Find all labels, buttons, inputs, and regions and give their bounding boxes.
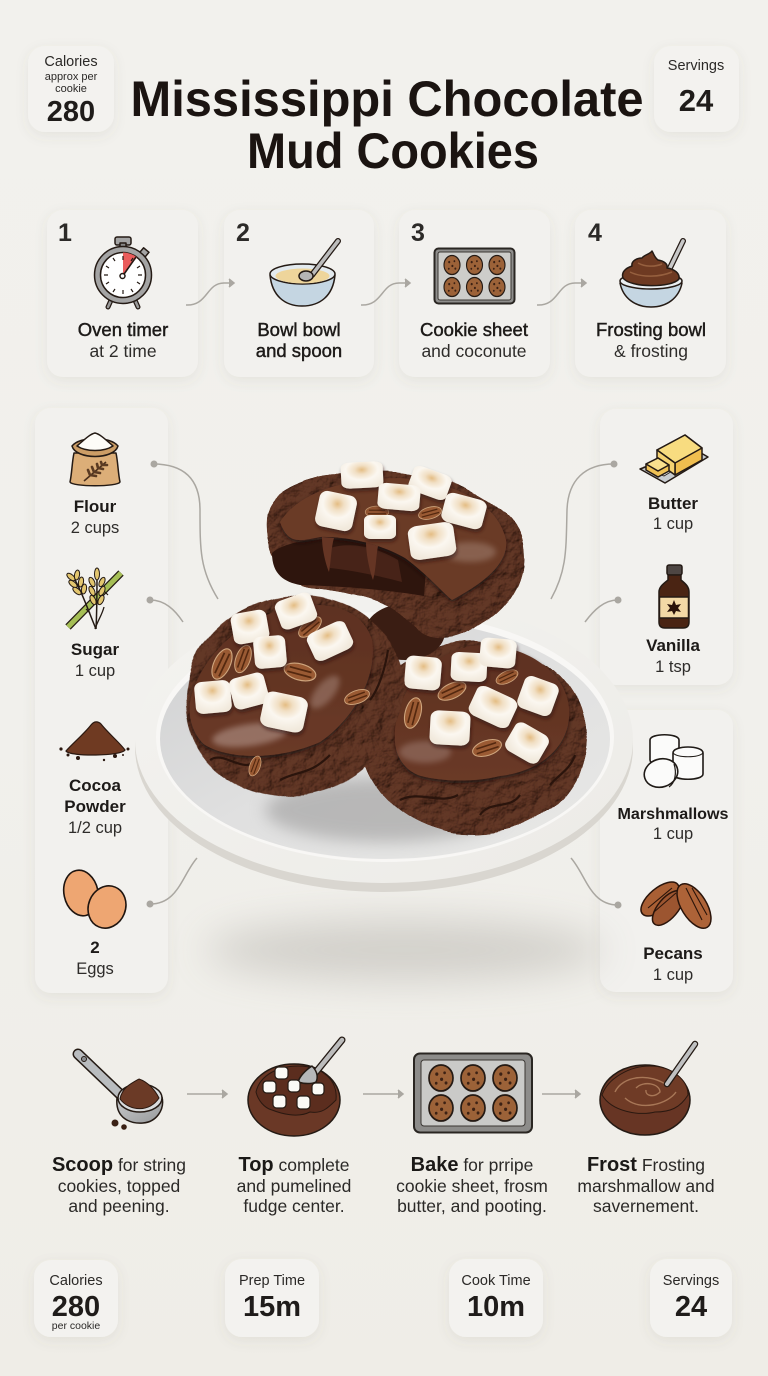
cookie: top with bite [266, 461, 524, 639]
process step: top: Top complete [238, 1154, 350, 1176]
panel: right ingredients bottom [600, 710, 733, 992]
arrow: step 1 to 2 [186, 279, 234, 305]
step card 4: frosting bowl [575, 210, 726, 377]
stat card: calories top: cookie [55, 83, 87, 95]
panel: right ingredients top [600, 409, 733, 685]
arrow: step 2 to 3 [361, 279, 410, 305]
stat card: calories top [28, 46, 114, 132]
stat card: calories top: Calories [44, 54, 98, 70]
process step: scoop: cookies, topped [58, 1176, 180, 1196]
panel: right ingredients bottom: Marshmallows [618, 806, 729, 823]
icon: frosting bowl [620, 241, 683, 307]
step card 1: oven timer: at 2 time [89, 341, 157, 361]
panel: left ingredients: 2 cups [71, 519, 119, 537]
panel: left ingredients: 1/2 cup [68, 819, 122, 837]
icon: baking tray [414, 1054, 532, 1132]
icon: cocoa powder pile [59, 722, 130, 761]
panel: left ingredients [35, 408, 168, 993]
stat card: servings: 24 [675, 1291, 707, 1323]
step card 2: bowl and spoon: 2 [236, 219, 250, 247]
panel: right ingredients bottom: 1 cup [653, 825, 693, 843]
step card 4: frosting bowl: Frosting bowl [596, 319, 706, 340]
stat card: cook time [449, 1259, 543, 1337]
icon: scoop [78, 1054, 163, 1130]
process step: frost: Frost Frosting [587, 1154, 705, 1176]
arrow: bake to frost [542, 1090, 580, 1098]
photo: plate of mud cookies [135, 461, 633, 892]
stat card: servings top: Servings [668, 58, 724, 74]
title: Mud Cookies [247, 123, 539, 179]
panel: left ingredients: Flour [74, 497, 117, 516]
stat card: calories [34, 1260, 118, 1337]
plate [135, 597, 633, 892]
stat card: servings top: 24 [679, 83, 714, 118]
cookie: front left [162, 571, 426, 821]
process step: scoop: and peening. [68, 1196, 170, 1216]
stat card: prep time [225, 1259, 319, 1337]
step card 1: oven timer [47, 210, 198, 377]
step card 2: bowl and spoon [224, 210, 374, 377]
step card 1: oven timer: Oven timer [78, 319, 168, 340]
process step: bake: cookie sheet, frosm [396, 1176, 548, 1196]
process step: frost: savernement. [593, 1196, 699, 1216]
stat card: prep time: Prep Time [239, 1273, 305, 1289]
stat card: servings [650, 1259, 732, 1337]
panel: right ingredients top: 1 tsp [655, 658, 691, 676]
panel: left ingredients: 1 cup [75, 662, 115, 680]
panel: left ingredients: Cocoa [69, 776, 122, 795]
panel: right ingredients bottom: 1 cup [653, 966, 693, 984]
ground shadow [205, 920, 605, 980]
icon: cookie with marshmallows [248, 1040, 342, 1136]
stat card: calories top: 280 [47, 96, 95, 128]
icon: sugar cane and wheat [66, 568, 121, 629]
step card 2: bowl and spoon: Bowl bowl [257, 319, 341, 340]
process step: bake [396, 1054, 548, 1216]
step card 2: bowl and spoon: and spoon [256, 340, 342, 361]
stat card: calories: per cookie [52, 1320, 100, 1332]
panel: right ingredients top: Vanilla [646, 636, 700, 655]
stat card: calories top: approx per [45, 71, 98, 83]
icon: pecans [635, 876, 718, 934]
step card 3: cookie sheet: and coconute [421, 341, 527, 361]
title: Mississippi Chocolate [130, 71, 644, 127]
stat card: prep time: 15m [243, 1291, 301, 1323]
icon: baking tray [434, 248, 514, 304]
step card 3: cookie sheet: 3 [411, 219, 425, 247]
cookie: bottom right [362, 604, 586, 834]
process step: bake: butter, and pooting. [397, 1196, 547, 1216]
icon: flour sack [70, 433, 120, 486]
stat card: calories: 280 [52, 1291, 100, 1323]
title [130, 71, 644, 179]
arrow: step 3 to 4 [537, 279, 586, 305]
stat card: cook time: Cook Time [461, 1273, 531, 1289]
process step: bake: Bake for prripe [411, 1154, 533, 1176]
step card 4: frosting bowl: & frosting [614, 341, 688, 361]
icon: butter [640, 435, 708, 483]
connectors: left leader lines [146, 460, 218, 908]
process step: top: and pumelined [237, 1176, 351, 1196]
process step: frost: marshmallow and [577, 1176, 715, 1196]
panel: right ingredients top: 1 cup [653, 515, 693, 533]
icon: eggs [60, 867, 132, 934]
process step: scoop: Scoop for string [52, 1154, 186, 1176]
panel: left ingredients: 2 [90, 938, 100, 957]
step card 1: oven timer: 1 [58, 219, 72, 247]
panel: left ingredients: Powder [64, 797, 126, 816]
stat card: servings top [654, 46, 739, 132]
icon: marshmallows [641, 735, 703, 792]
process step: frost [577, 1044, 715, 1216]
icon: mixing bowl [270, 241, 338, 306]
icon: vanilla bottle [659, 565, 689, 628]
panel: left ingredients: Eggs [76, 960, 114, 978]
step card 4: frosting bowl: 4 [588, 219, 602, 247]
arrow: top to bake [363, 1090, 403, 1098]
stat card: servings: Servings [663, 1273, 719, 1289]
icon: frosted cookie [600, 1044, 695, 1135]
step card 3: cookie sheet: Cookie sheet [420, 319, 528, 340]
stat card: calories: Calories [49, 1273, 103, 1289]
panel: right ingredients top: Butter [648, 494, 698, 513]
panel: right ingredients bottom: Pecans [643, 944, 703, 963]
icon: timer [94, 237, 152, 307]
stat card: cook time: 10m [467, 1291, 525, 1323]
step card 3: cookie sheet [399, 210, 550, 377]
process step: top: fudge center. [243, 1196, 345, 1216]
connectors: right leader lines [551, 460, 622, 908]
process step: top [237, 1040, 351, 1216]
process step: scoop [52, 1054, 186, 1216]
panel: left ingredients: Sugar [71, 640, 119, 659]
arrow: scoop to top [187, 1090, 227, 1098]
